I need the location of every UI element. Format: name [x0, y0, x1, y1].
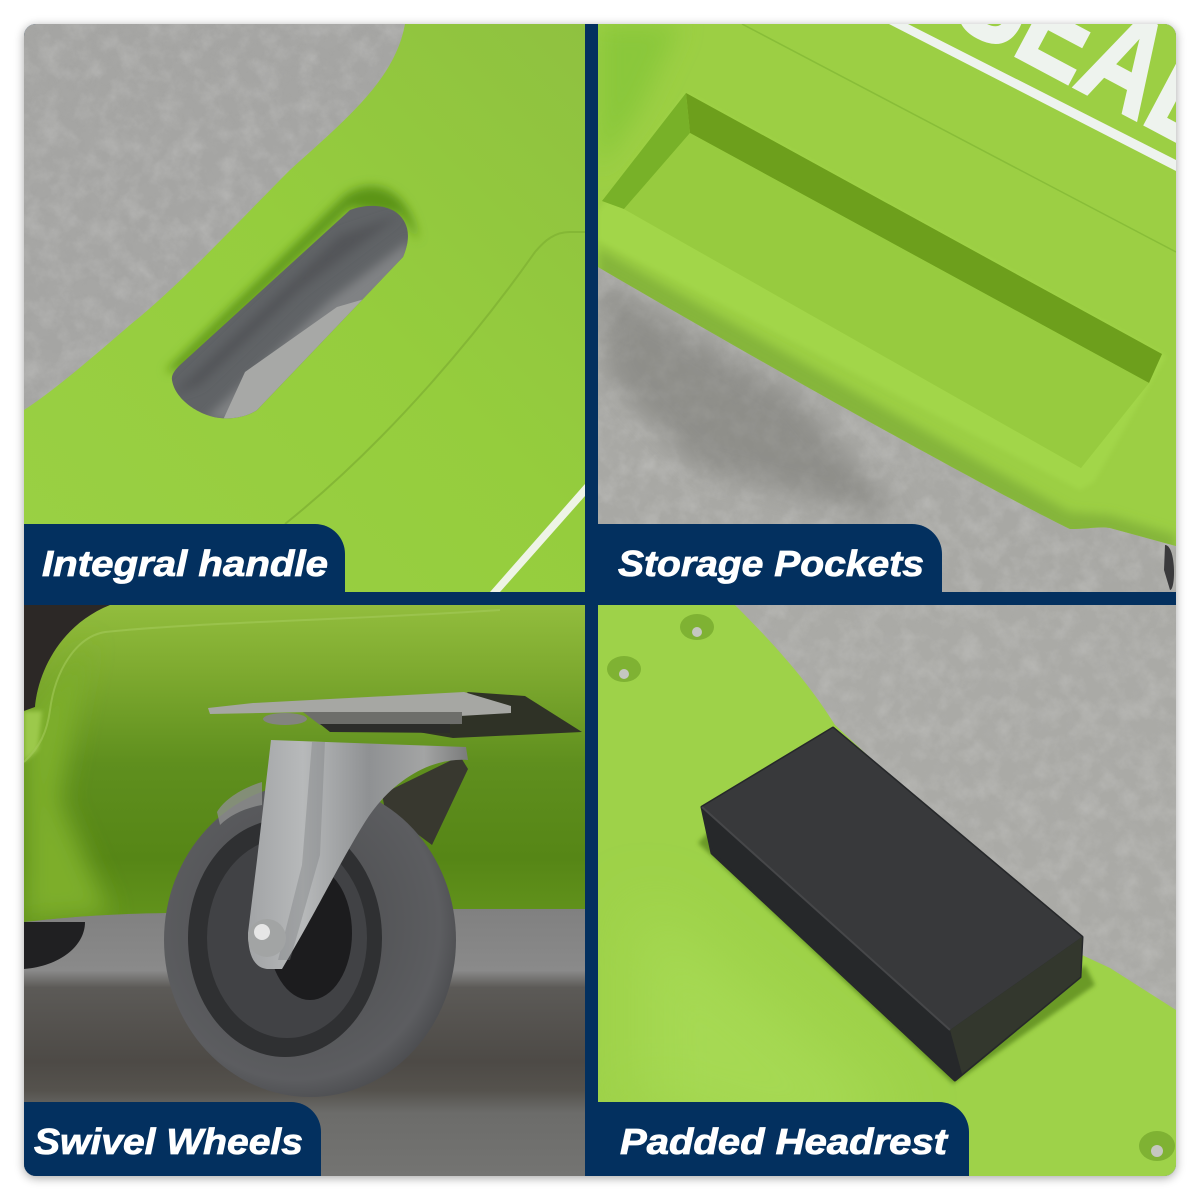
- floor shadow: [598, 280, 900, 520]
- label: Swivel Wheels: Swivel Wheels: [34, 1121, 303, 1162]
- white printed lettering: [889, 24, 1176, 171]
- icon: headrest pad: [702, 728, 1082, 1080]
- panel: integral handle: [24, 24, 585, 592]
- recess shadow: [698, 825, 1095, 1084]
- label: Integral handle: [24, 524, 345, 592]
- slot shadow: [165, 186, 418, 372]
- panel: padded headrest: [598, 605, 1176, 1176]
- panel: storage pockets: [598, 0, 1200, 592]
- fork rear: [382, 756, 468, 845]
- icon: handle slot: [172, 206, 410, 420]
- label: Padded Headrest: Padded Headrest: [620, 1121, 949, 1162]
- rivets: [607, 656, 641, 682]
- label: Swivel Wheels: [24, 1102, 321, 1176]
- green body: [598, 24, 1176, 546]
- label: Storage Pockets: Storage Pockets: [618, 543, 924, 584]
- brighter highlight: [660, 974, 828, 1102]
- green body: [598, 605, 1176, 1176]
- icon: swivel caster and wheel: [164, 692, 582, 1097]
- icon: storage pocket tray: [602, 93, 1162, 383]
- lower side wall: [598, 248, 1176, 560]
- raised panel line: [285, 232, 585, 524]
- plate shadow: [418, 692, 582, 738]
- wheel peek: [1164, 545, 1174, 590]
- tyre: [164, 783, 456, 1097]
- green creeper body: [24, 24, 585, 592]
- label: Integral handle: Integral handle: [42, 543, 328, 584]
- fork: [248, 740, 468, 969]
- label: Padded Headrest: [585, 1102, 969, 1176]
- label: Storage Pockets: [598, 524, 942, 592]
- white printed stripe: [490, 484, 585, 592]
- green body side: [24, 605, 585, 922]
- panel: swivel wheels: [24, 605, 585, 1176]
- corner shading: [598, 24, 672, 148]
- far wheel: [24, 922, 85, 969]
